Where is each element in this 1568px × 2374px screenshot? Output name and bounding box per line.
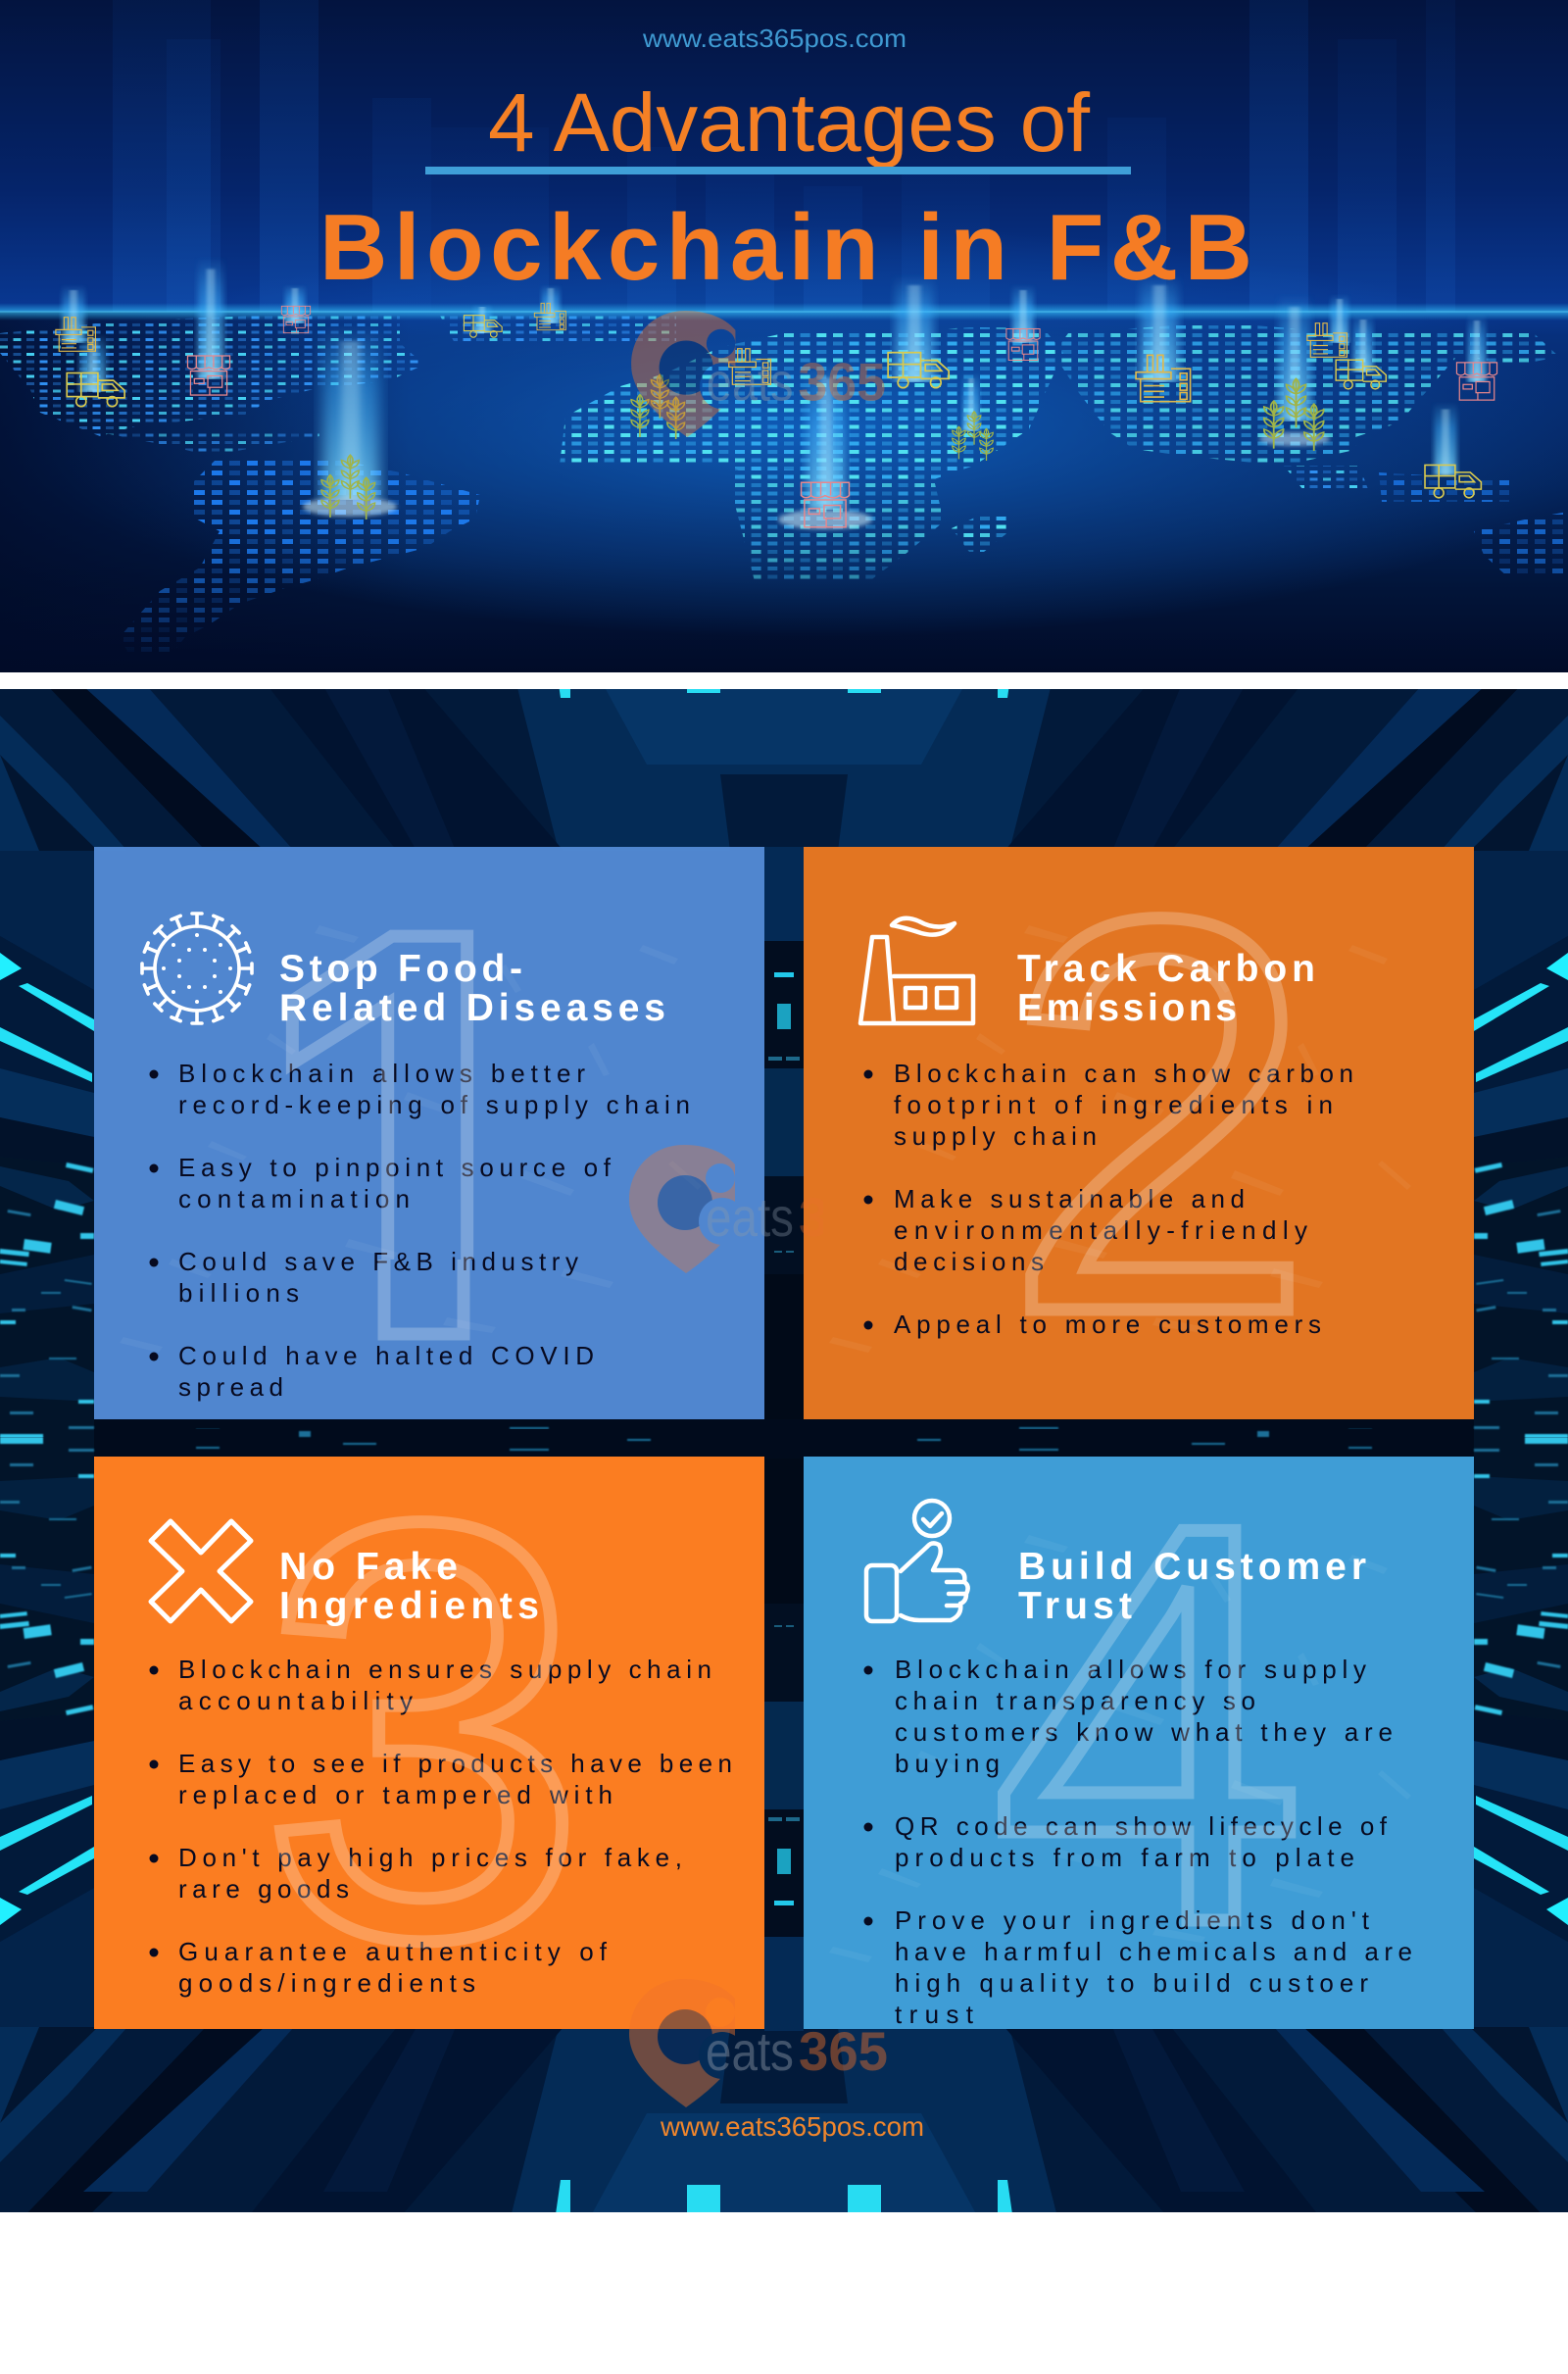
bullet list: footprint of ingredients in — [894, 1090, 1333, 1119]
bullet list: rare goods — [178, 1874, 349, 1904]
bullet list: Blockchain allows better — [178, 1059, 585, 1088]
bullet list: record-keeping of supply chain — [178, 1090, 690, 1119]
bullet list: Blockchain can show carbon — [894, 1059, 1353, 1088]
outlined number 3: 3 — [259, 1400, 588, 2062]
heading — [1017, 948, 1315, 1029]
heading: Stop Food- — [279, 948, 522, 990]
bullet list: high quality to build custoer — [895, 1968, 1368, 1998]
title underline — [425, 167, 1131, 174]
bullet list: contamination — [178, 1184, 410, 1213]
bullet list: spread — [178, 1372, 283, 1402]
bullet list: Prove your ingredients don't — [895, 1905, 1370, 1935]
outlined number 1 — [286, 929, 474, 1341]
bullet list: have harmful chemicals and are — [895, 1937, 1412, 1966]
bullet list: Easy to pinpoint source of — [178, 1153, 612, 1182]
bullet list: Easy to see if products have been — [178, 1749, 732, 1778]
title line 1: 4 Advantages of — [488, 76, 1091, 169]
white divider band — [0, 672, 1568, 689]
bullet list: decisions — [894, 1247, 1044, 1276]
outlined number 4: 4 — [991, 1409, 1306, 2041]
bullet list: QR code can show lifecycle of — [895, 1811, 1388, 1841]
bottom website url: www.eats365pos.com — [660, 2111, 924, 2142]
panel: track carbon emissions — [804, 803, 1474, 1429]
bullet list: trust — [895, 2000, 974, 2029]
heading: Build Customer — [1018, 1546, 1366, 1588]
icon: cross — [151, 1521, 251, 1621]
map icons: shops — [187, 306, 1497, 527]
icon: virus — [142, 914, 252, 1023]
map icons: factories — [56, 303, 1347, 402]
bullet list: replaced or tampered with — [178, 1780, 612, 1809]
bullet list: goods/ingredients — [178, 1968, 475, 1998]
heading: Emissions — [1017, 987, 1237, 1029]
bullet list: products from farm to plate — [895, 1843, 1354, 1872]
bullet list: chain transparency so — [895, 1686, 1255, 1715]
outlined number 1: 1 — [253, 812, 574, 1458]
bullet list: customers know what they are — [895, 1717, 1393, 1747]
bullet list: environmentally-friendly — [894, 1215, 1307, 1245]
heading — [279, 948, 665, 1029]
light beams — [63, 257, 1486, 529]
heading: Track Carbon — [1017, 948, 1315, 990]
heading: Ingredients — [279, 1585, 539, 1627]
bullet list: supply chain — [894, 1121, 1097, 1151]
bullet list: Guarantee authenticity of — [178, 1937, 608, 1966]
panel: stop food-related diseases — [94, 847, 764, 1419]
bullet list: Blockchain ensures supply chain — [178, 1655, 711, 1684]
bullet list: billions — [178, 1278, 299, 1308]
bullet list — [864, 1059, 1353, 1339]
panel: build customer trust — [804, 1409, 1474, 2041]
heading: Trust — [1018, 1585, 1132, 1627]
bullet list: Appeal to more customers — [894, 1310, 1321, 1339]
title line 2: Blockchain in F&B — [319, 195, 1252, 300]
bullet list: Make sustainable and — [894, 1184, 1245, 1213]
horizon light line — [0, 303, 1568, 321]
heading: No Fake — [279, 1546, 458, 1588]
map icons: trucks — [67, 316, 1481, 498]
bullet list — [149, 1655, 732, 1998]
bullet list: Don't pay high prices for fake, — [178, 1843, 682, 1872]
bullet list: Could have halted COVID — [178, 1341, 594, 1370]
panel: no fake ingredients — [94, 1400, 764, 2062]
heading — [279, 1546, 539, 1627]
bullet list: buying — [895, 1749, 1000, 1778]
background: tunnel scene — [0, 657, 1568, 2221]
heading: Related Diseases — [279, 987, 665, 1029]
bullet list: Blockchain allows for supply — [895, 1655, 1366, 1684]
watermark logo: centre — [629, 1145, 804, 1273]
watermark logo: bottom — [629, 1979, 888, 2107]
bullet list: accountability — [178, 1686, 413, 1715]
watermark logo: header — [631, 311, 886, 437]
heading — [1018, 1546, 1366, 1627]
bullet list — [149, 1059, 690, 1402]
icon: thumbs up with check — [866, 1501, 968, 1621]
header banner with world map — [0, 0, 1568, 672]
white footer strip — [0, 2212, 1568, 2374]
bullet list — [864, 1655, 1412, 2029]
outlined number 2: 2 — [1004, 803, 1315, 1429]
bullet list: Could save F&B industry — [178, 1247, 578, 1276]
top website url: www.eats365pos.com — [642, 24, 906, 53]
icon: factory — [860, 918, 973, 1023]
world map dots — [0, 316, 1568, 657]
map icons: plants — [321, 374, 1324, 520]
